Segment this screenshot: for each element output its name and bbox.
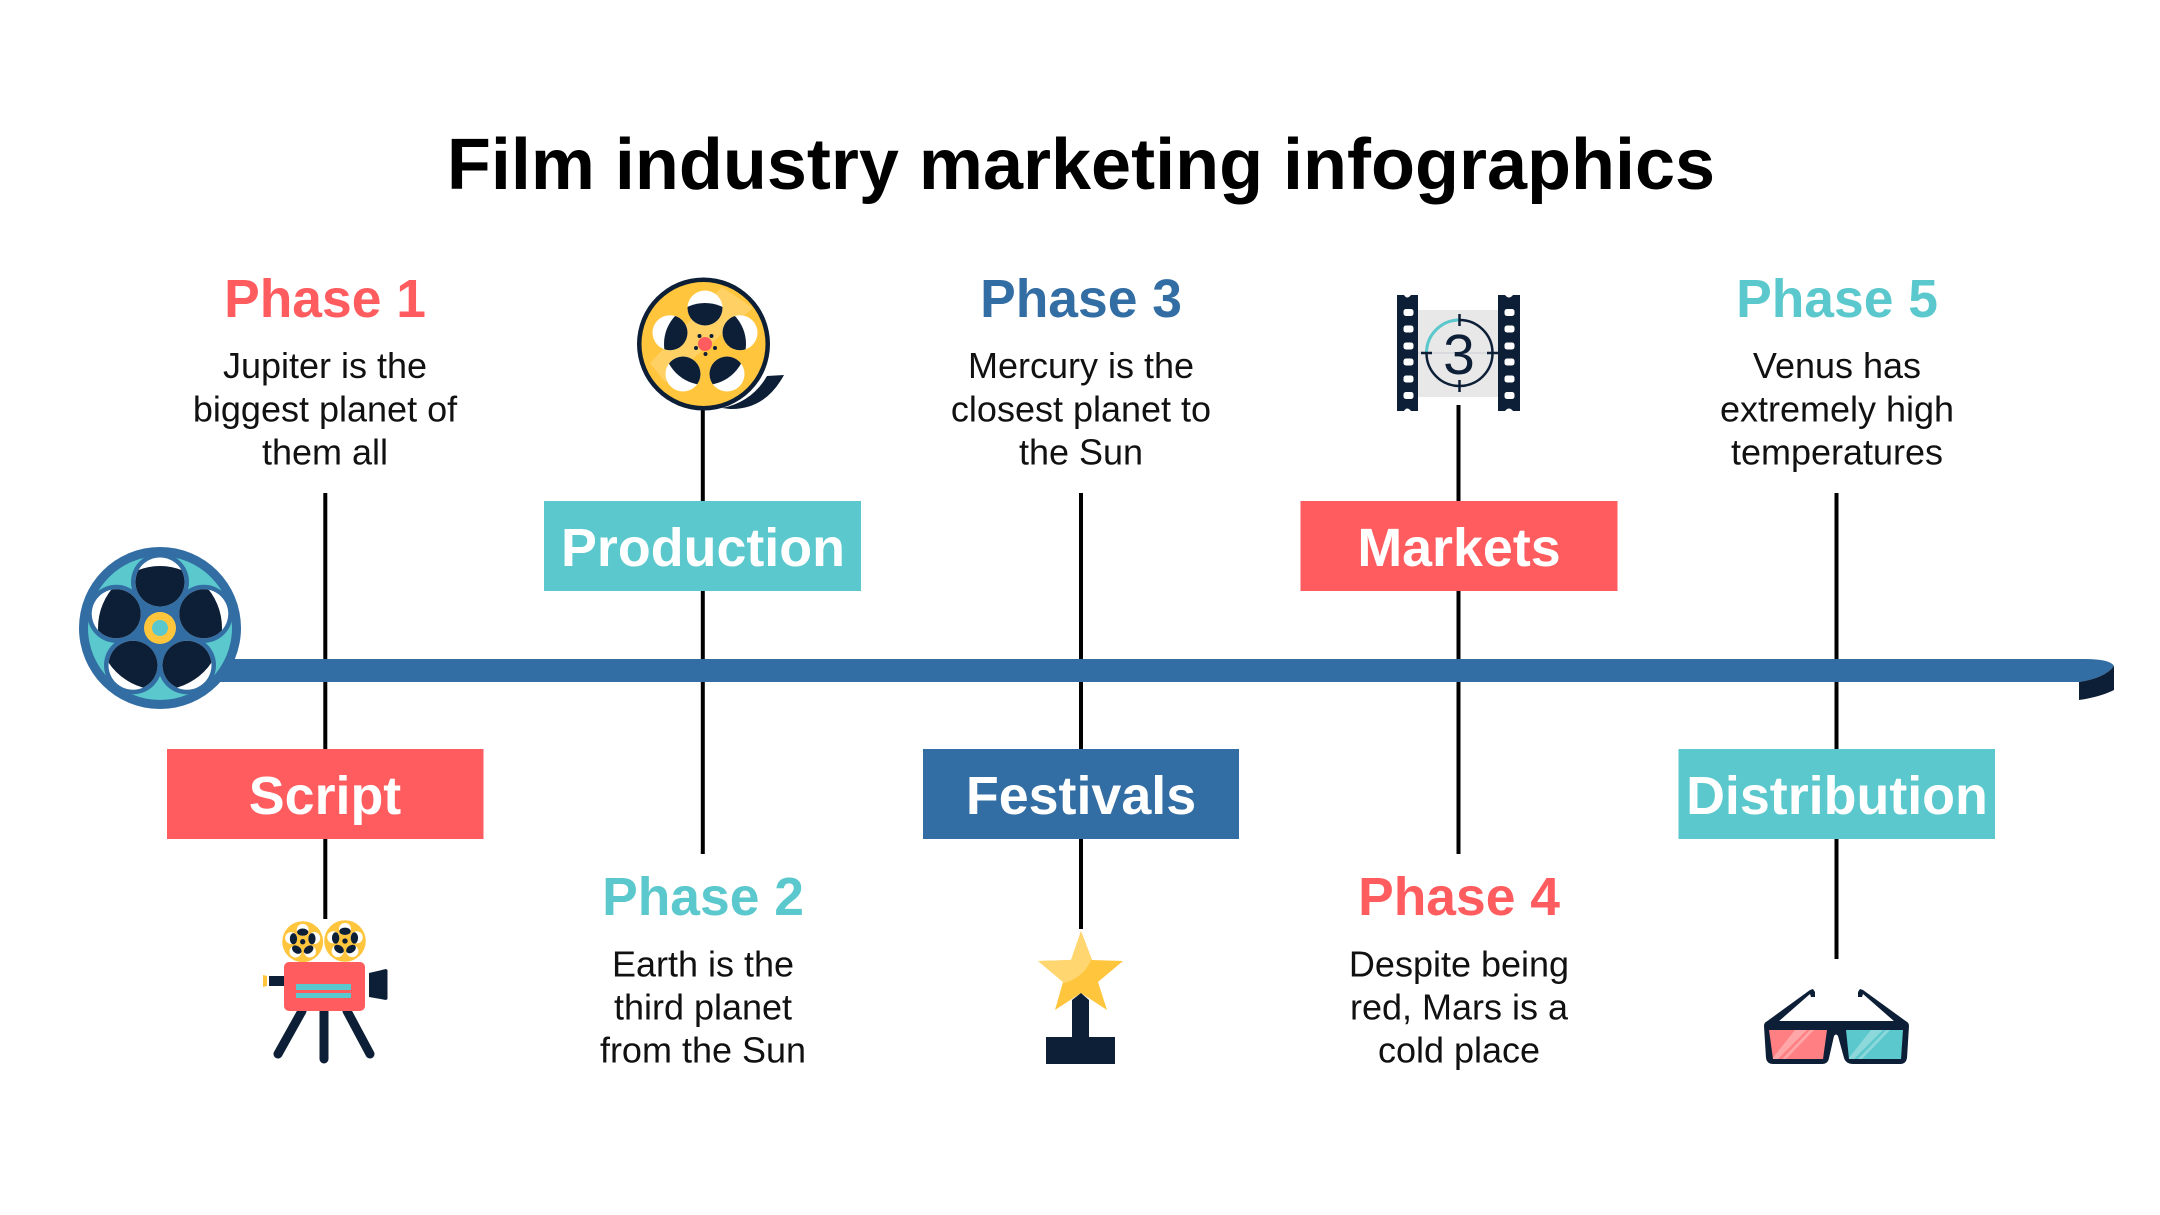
title: Film industry marketing infographics: [447, 125, 1715, 205]
icon: film countdown: [1397, 295, 1520, 411]
label: Distribution: [1678, 749, 1995, 839]
label: Markets: [1300, 501, 1618, 591]
phase 3 description: the Sun: [1019, 432, 1143, 472]
icon: 3D glasses: [1764, 989, 1909, 1064]
label: Production: [544, 501, 861, 591]
panel: phase 4: [1349, 868, 1569, 1070]
icon: film countdown: 3: [1443, 323, 1475, 387]
phase 1 heading: Phase 1: [224, 270, 426, 329]
phase 5 description: temperatures: [1731, 432, 1943, 472]
icon: yellow film reel: [637, 278, 784, 410]
icon: award star trophy: [1038, 931, 1123, 1064]
phase 2 heading: Phase 2: [602, 868, 804, 927]
label: Markets: Markets: [1357, 518, 1561, 578]
phase 4 heading: Phase 4: [1358, 868, 1560, 927]
phase 2 description: from the Sun: [600, 1030, 806, 1070]
phase 1 description: them all: [262, 432, 388, 472]
label: Script: Script: [249, 766, 401, 826]
label: Script: [167, 749, 484, 839]
icon: movie camera: [263, 920, 388, 1059]
phase 4 description: cold place: [1378, 1030, 1540, 1070]
phase 4 description: red, Mars is a: [1350, 986, 1569, 1028]
panel: phase 5: [1720, 270, 1954, 472]
label: Festivals: [923, 749, 1239, 839]
panel: phase 3: [951, 270, 1211, 472]
timeline film strip bar: [200, 659, 2114, 700]
phase 5 description: extremely high: [1720, 388, 1954, 430]
phase 1 description: Jupiter is the: [223, 345, 427, 386]
phase 4 description: Despite being: [1349, 944, 1569, 984]
phase 5 heading: Phase 5: [1736, 270, 1938, 329]
phase 5 description: Venus has: [1753, 345, 1921, 386]
phase 3 heading: Phase 3: [980, 270, 1182, 329]
phase 2 description: Earth is the: [612, 944, 794, 984]
label: Distribution: Distribution: [1686, 766, 1988, 826]
icon: blue film reel: [79, 547, 241, 709]
phase 2 description: third planet: [614, 986, 792, 1028]
label: Production: Production: [561, 518, 845, 578]
phase 1 description: biggest planet of: [193, 388, 458, 430]
panel: phase 2: [600, 868, 806, 1070]
label: Festivals: Festivals: [966, 766, 1196, 826]
connector lines: [325, 405, 1836, 959]
phase 3 description: Mercury is the: [968, 345, 1194, 386]
phase 3 description: closest planet to: [951, 388, 1211, 430]
panel: phase 1: [193, 270, 458, 472]
